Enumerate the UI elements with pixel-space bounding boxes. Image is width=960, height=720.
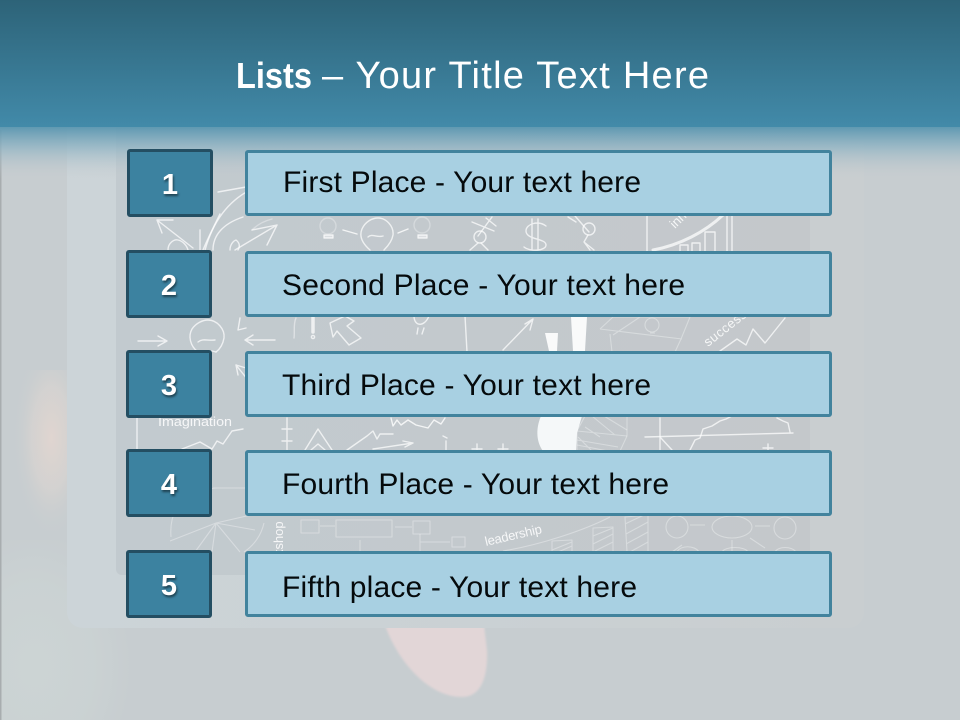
text 1: First Place - Your text here — [283, 166, 641, 199]
number 1: 1 — [162, 169, 178, 201]
doodle label: imagination: Imagination — [158, 414, 232, 429]
doodle label: success: success — [701, 306, 750, 349]
text bar 2 — [246, 252, 830, 316]
number 3: 3 — [161, 370, 177, 402]
doodle: flow chart boxes — [301, 520, 465, 552]
text bar 5 — [246, 552, 830, 616]
doodle: stick figures and dollar sign — [470, 216, 595, 250]
doodle: rising zigzag — [720, 318, 785, 351]
list row 5 — [128, 552, 830, 616]
text bar 4 — [246, 452, 830, 514]
text 4: Fourth Place - Your text here — [282, 468, 669, 501]
doodle: hatched pie — [577, 416, 627, 451]
number 5: 5 — [161, 570, 177, 602]
doodle: hatched bars and ovals — [503, 515, 796, 552]
whiteboard doodles on screen — [137, 187, 796, 578]
tablet screen — [116, 110, 810, 575]
list row 1 — [128, 150, 830, 216]
header fade into photo — [0, 127, 960, 179]
text 5: Fifth place - Your text here — [282, 571, 637, 604]
doodle: open box with bulb — [600, 317, 690, 352]
doodle: exclamation and block arrow — [294, 316, 533, 352]
doodle: light bulbs — [320, 217, 430, 250]
doodle: white column shapes — [545, 317, 587, 351]
number 4: 4 — [161, 469, 177, 501]
doodle label: workshop: workshop — [271, 521, 286, 578]
header band — [0, 0, 960, 127]
text bar 1 — [246, 152, 830, 214]
number box 1 — [128, 150, 212, 216]
text 2: Second Place - Your text here — [282, 269, 685, 302]
text bar 3 — [246, 352, 830, 416]
doodle: bar chart — [647, 215, 732, 251]
number box 3 — [128, 352, 210, 416]
number box 4 — [128, 450, 210, 516]
number box 2 — [128, 252, 210, 316]
doodle: pie wheel — [170, 488, 264, 552]
doodle: trend lines and triangle — [137, 418, 508, 452]
doodle: bulb and arrows — [138, 318, 275, 385]
doodle label: innovation: inno — [667, 203, 695, 231]
doodle label: leadership: leadership — [483, 521, 543, 549]
title: – Your Title Text Here — [322, 55, 709, 97]
doodle: white bulb silhouette — [537, 416, 582, 451]
number 2: 2 — [161, 270, 177, 302]
doodle: growth arrows — [157, 187, 277, 250]
doodle: stock chart — [645, 416, 793, 452]
title: Lists — [236, 55, 312, 96]
list row 2 — [128, 252, 830, 316]
tablet body — [67, 110, 864, 628]
text 3: Third Place - Your text here — [282, 369, 651, 402]
number box 5 — [128, 552, 210, 616]
list row 3 — [128, 352, 830, 416]
list row 4 — [128, 450, 830, 516]
